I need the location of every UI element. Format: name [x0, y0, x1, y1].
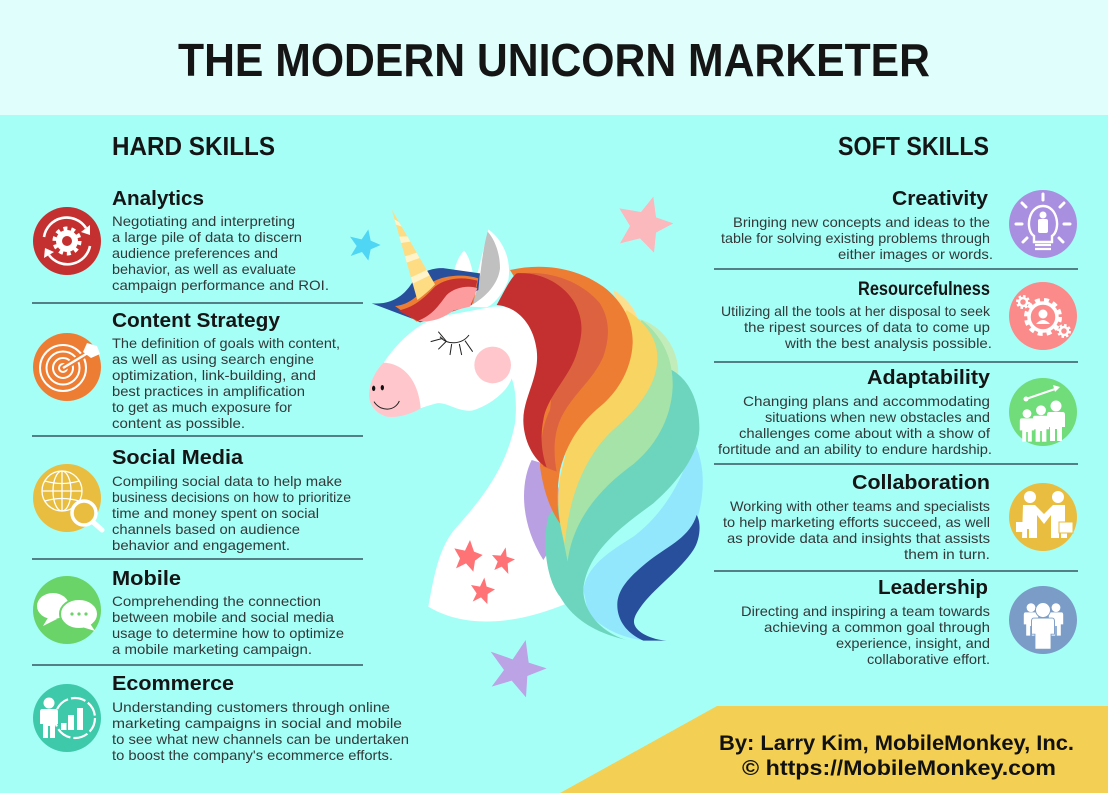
description: analytics: campaign performance and ROI.: [112, 277, 329, 293]
skill: resourcefulness: [721, 279, 1077, 351]
description: adaptability: challenges come about with a show of: [739, 425, 990, 441]
horn: [392, 209, 435, 300]
skill: ecommerce: [33, 672, 409, 763]
header band: [0, 0, 1108, 115]
description: mobile: Comprehending the connection: [112, 593, 321, 609]
description: creativity: table for solving existing problems through: [721, 230, 990, 246]
description: resourcefulness: Utilizing all the tools at her disposal to seek: [721, 303, 991, 319]
heading: creativity: Creativity: [892, 187, 989, 210]
description: creativity: Bringing new concepts and ideas to the: [733, 214, 990, 230]
back ear: [453, 251, 473, 273]
description: analytics: Negotiating and interpreting: [112, 213, 295, 229]
description: ecommerce: Understanding customers through online: [112, 699, 390, 715]
description: leadership: Directing and inspiring a team towards: [741, 603, 990, 619]
description: adaptability: fortitude and an ability to endure hardship.: [718, 441, 992, 457]
panel: soft skills: [714, 133, 1078, 667]
copyright url: © https://MobileMonkey.com: [742, 757, 1056, 780]
nostrils: [372, 385, 384, 391]
heading: analytics: Analytics: [112, 187, 204, 210]
heading: adaptability: Adaptability: [867, 366, 991, 389]
description: collaboration: as provide data and insights that assists: [727, 530, 990, 546]
description: mobile: a mobile marketing campaign.: [112, 641, 312, 657]
description: content strategy: optimization, link-building, and: [112, 367, 316, 383]
description: resourcefulness: the ripest sources of data to come up: [744, 319, 990, 335]
description: content strategy: content as possible.: [112, 415, 245, 431]
description: resourcefulness: with the best analysis possible.: [784, 335, 992, 351]
description: ecommerce: [112, 699, 409, 763]
icon: light bulb: [1009, 190, 1077, 258]
description: social media: behavior and engagement.: [112, 537, 290, 553]
cheek: [474, 347, 511, 383]
description: resourcefulness: [721, 303, 992, 351]
heading: resourcefulness: Resourcefulness: [858, 279, 990, 300]
description: social media: channels based on audience: [112, 521, 300, 537]
description: leadership: experience, insight, and: [836, 635, 990, 651]
panel: hard skills: [32, 133, 409, 763]
description: adaptability: situations when new obstacles and: [765, 409, 990, 425]
skill: leadership: [741, 576, 1077, 667]
description: collaboration: Working with other teams and specialists: [730, 498, 990, 514]
description: social media: business decisions on how to prioritize: [112, 489, 351, 505]
heading: hard skills: HARD SKILLS: [112, 133, 275, 161]
skill: analytics: [33, 187, 329, 293]
skill: mobile: [33, 567, 344, 657]
icon: team of three: [1009, 586, 1077, 654]
star: purple: [491, 640, 547, 697]
skill: collaboration: [723, 471, 1077, 562]
byline: By: Larry Kim, MobileMonkey, Inc.: [719, 732, 1074, 755]
description: creativity: either images or words.: [838, 246, 993, 262]
attribution banner: [560, 706, 1108, 793]
mane: [497, 267, 703, 641]
skill: creativity: [721, 187, 1077, 262]
icon: handshake: [1009, 483, 1077, 551]
description: analytics: [112, 213, 329, 293]
smile: [374, 401, 399, 409]
description: collaboration: [723, 498, 990, 562]
icon: rising team: [1009, 378, 1077, 446]
description: content strategy: [112, 335, 340, 431]
description: social media: time and money spent on social: [112, 505, 319, 521]
icon: speech bubbles: [33, 576, 101, 644]
description: mobile: [112, 593, 344, 657]
icon: target with arrow: [33, 333, 101, 401]
description: collaboration: to help marketing efforts succeed, as well: [723, 514, 990, 530]
heading: mobile: Mobile: [112, 567, 181, 590]
title: THE MODERN UNICORN MARKETER: [178, 34, 930, 86]
description: content strategy: The definition of goals with content,: [112, 335, 340, 351]
description: ecommerce: to boost the company's ecommerce efforts.: [112, 747, 393, 763]
icon: gear with arrows: [33, 207, 101, 275]
icon: globe and magnifier: [33, 464, 102, 532]
heading: leadership: Leadership: [878, 576, 988, 599]
heading: collaboration: Collaboration: [852, 471, 990, 494]
skill: content strategy: [33, 309, 340, 431]
description: mobile: between mobile and social media: [112, 609, 334, 625]
description: leadership: [741, 603, 990, 667]
description: mobile: usage to determine how to optimize: [112, 625, 344, 641]
heading: soft skills: SOFT SKILLS: [838, 133, 989, 161]
description: leadership: achieving a common goal through: [764, 619, 990, 635]
eye: [431, 332, 473, 355]
description: creativity: [721, 214, 993, 262]
description: ecommerce: to see what new channels can be undertaken: [112, 731, 409, 747]
icon: gears with person: [1009, 282, 1077, 350]
icon: person and bar chart: [33, 684, 101, 752]
star: pink: [619, 197, 673, 253]
description: collaboration: them in turn.: [904, 546, 990, 562]
skill: social media: [33, 446, 351, 553]
description: content strategy: to get as much exposure for: [112, 399, 292, 415]
head and neck: [383, 307, 567, 621]
heading: social media: Social Media: [112, 446, 244, 469]
description: social media: Compiling social data to help make: [112, 473, 342, 489]
description: adaptability: [718, 393, 992, 457]
description: content strategy: as well as using search engine: [112, 351, 314, 367]
description: adaptability: Changing plans and accommodating: [743, 393, 990, 409]
ear: [469, 229, 509, 307]
heading: ecommerce: Ecommerce: [112, 672, 234, 695]
description: ecommerce: marketing campaigns in social and mobile: [112, 715, 402, 731]
heading: content strategy: Content Strategy: [112, 309, 281, 332]
skill: adaptability: [718, 366, 1077, 457]
description: analytics: behavior, as well as evaluate: [112, 261, 296, 277]
description: analytics: audience preferences and: [112, 245, 278, 261]
illustration: unicorn head: [350, 197, 703, 697]
description: content strategy: best practices in amplification: [112, 383, 305, 399]
muzzle: [369, 363, 421, 417]
chest stars: [454, 540, 515, 604]
description: leadership: collaborative effort.: [867, 651, 990, 667]
star: blue: [350, 229, 381, 261]
description: analytics: a large pile of data to discern: [112, 229, 302, 245]
forelock: [372, 268, 480, 322]
description: social media: [112, 473, 351, 553]
